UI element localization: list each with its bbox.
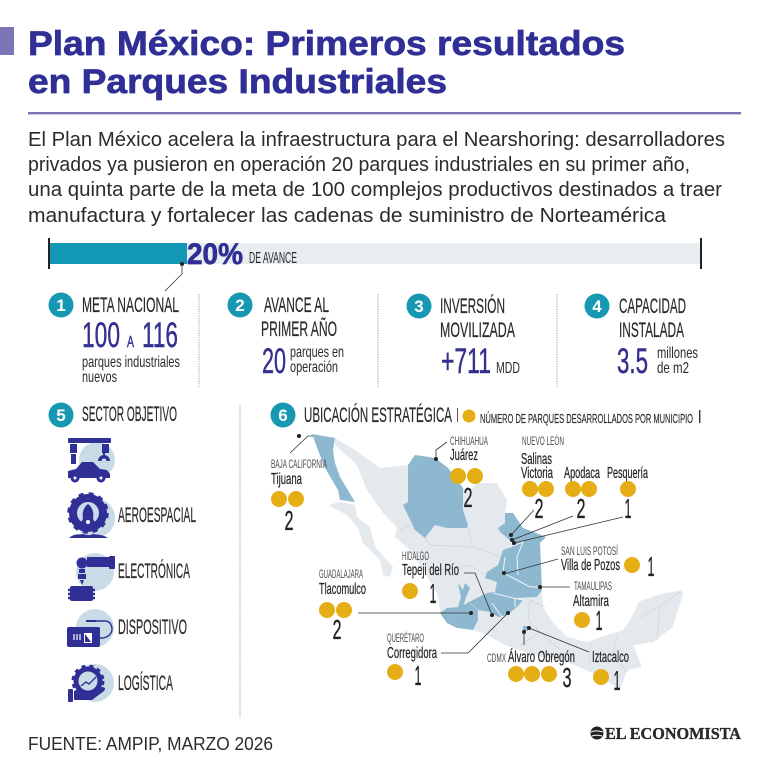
progress bar bbox=[48, 238, 702, 291]
heading: ubicación estratégica bbox=[270, 402, 700, 428]
panel: inversión movilizada: 3 bbox=[414, 297, 424, 316]
panel: avance al primer año: PRIMER AÑO bbox=[261, 317, 337, 341]
panel: capacidad instalada: INSTALADA bbox=[619, 319, 684, 342]
map: Aguascalientes bbox=[458, 583, 470, 607]
callout: Corregidora: 1 bbox=[414, 660, 422, 691]
map: mainland bbox=[335, 438, 683, 690]
callout: Tepeji del Río bbox=[402, 549, 494, 617]
panel: avance al primer año: 20 bbox=[262, 342, 286, 381]
callout: Iztacalco: 1 bbox=[614, 665, 620, 696]
panel: meta nacional: A bbox=[127, 334, 134, 351]
callout: Álvaro Obregón bbox=[487, 630, 575, 693]
callout: Nuevo León: Apodaca bbox=[564, 465, 600, 482]
callout: Tlacomulco: 2 bbox=[332, 614, 342, 645]
callout: Tepeji del Río: Tepeji del Río bbox=[402, 562, 459, 579]
icon: device bbox=[67, 609, 114, 647]
map: Chihuahua bbox=[403, 455, 468, 538]
callout: Altamira: TAMAULIPAS bbox=[574, 579, 612, 593]
text: 1 bbox=[648, 551, 654, 582]
panel: capacidad instalada: 4 bbox=[592, 297, 602, 316]
panel: meta nacional: META NACIONAL bbox=[82, 294, 179, 317]
callout: Tijuana: 2 bbox=[284, 505, 294, 536]
source: FUENTE: AMPIP, MARZO 2026 bbox=[28, 734, 273, 754]
callout: Tlacomulco: GUADALAJARA bbox=[319, 567, 363, 581]
panel: avance al primer año: AVANCE AL bbox=[264, 294, 329, 317]
callout: Nuevo León: Pesquería bbox=[607, 465, 648, 482]
callout: Iztacalco bbox=[527, 626, 629, 696]
panel: meta nacional: nuevos bbox=[82, 369, 117, 386]
title bbox=[28, 25, 625, 101]
map: CDMX bbox=[523, 626, 528, 631]
callout: Altamira bbox=[538, 579, 612, 636]
sector labels: DISPOSITIVO bbox=[118, 616, 187, 639]
panel: sector objetivo: SECTOR OBJETIVO bbox=[82, 403, 177, 426]
title: Plan México: Primeros resultados bbox=[28, 25, 625, 63]
callout: Juárez: Juárez bbox=[450, 447, 478, 464]
callout: Corregidora bbox=[387, 611, 510, 691]
icon: aerospace gear bbox=[69, 494, 115, 538]
callout: Nuevo León: 1 bbox=[624, 493, 632, 524]
panel: meta nacional: 1 bbox=[56, 296, 66, 315]
sector labels: ELECTRÓNICA bbox=[118, 560, 190, 583]
panel: capacidad instalada: CAPACIDAD bbox=[619, 295, 686, 318]
panel: meta nacional: 116 bbox=[142, 316, 178, 355]
map of Mexico bbox=[312, 434, 683, 690]
intro text: El Plan México acelera la infraestructura para el Nearshoring: desarrolladores bbox=[28, 129, 725, 151]
panel: meta nacional bbox=[48, 292, 180, 386]
callout: Juárez: CHIHUAHUA bbox=[450, 434, 488, 448]
intro text: privados ya pusieron en operación 20 parques industriales en su primer año, bbox=[28, 154, 690, 176]
map: state borders bbox=[492, 542, 542, 617]
sector labels: LOGÍSTICA bbox=[118, 672, 173, 695]
callout: Nuevo León bbox=[509, 433, 648, 545]
intro text: manufactura y fortalecer las cadenas de suministro de Norteamérica bbox=[28, 205, 667, 227]
panel: inversión movilizada: MDD bbox=[496, 360, 520, 377]
progress bar: 20% bbox=[187, 238, 243, 271]
callout: Juárez bbox=[434, 434, 488, 513]
callout: Tepeji del Río: HIDALGO bbox=[402, 549, 429, 563]
progress bar: DE AVANCE bbox=[249, 250, 297, 267]
callout: Nuevo León: 2 bbox=[534, 493, 544, 524]
panel: meta nacional: 100 bbox=[82, 316, 120, 355]
callout: Villa de Pozos: Villa de Pozos bbox=[561, 557, 620, 574]
callout: Villa de Pozos: SAN LUIS POTOSÍ bbox=[561, 543, 618, 558]
heading: ubicación estratégica: 6 bbox=[278, 406, 288, 425]
callout: Altamira: 1 bbox=[596, 605, 602, 636]
panel: capacidad instalada: millones bbox=[657, 345, 698, 362]
callout: Tijuana: Tijuana bbox=[271, 471, 302, 488]
intro text: una quinta parte de la meta de 100 complejos productivos destinados a traer bbox=[28, 179, 722, 201]
panel: avance al primer año bbox=[228, 292, 344, 381]
text: AEROESPACIAL bbox=[118, 504, 196, 527]
panel: meta nacional: parques industriales bbox=[82, 354, 180, 371]
icon: electronics arm bbox=[68, 553, 115, 601]
panel: inversión movilizada: INVERSIÓN bbox=[440, 295, 505, 318]
callout: Juárez: 2 bbox=[464, 482, 472, 513]
panel: capacidad instalada: de m2 bbox=[657, 360, 689, 377]
map: Baja California Sur bbox=[328, 502, 393, 577]
panel: inversión movilizada: +711 bbox=[441, 342, 491, 381]
callout: Tijuana bbox=[271, 434, 327, 536]
panel: sector objetivo: 5 bbox=[56, 406, 66, 425]
panel: capacidad instalada: 3.5 bbox=[617, 342, 648, 381]
callout: Álvaro Obregón: CDMX bbox=[487, 651, 506, 665]
callout: Nuevo León: NUEVO LEÓN bbox=[522, 433, 564, 448]
panel: inversión movilizada bbox=[406, 294, 520, 381]
heading: ubicación estratégica: UBICACIÓN ESTRATÉGICA bbox=[304, 404, 452, 427]
callout: Tepeji del Río: 1 bbox=[430, 578, 436, 609]
title: en Parques Industriales bbox=[28, 63, 447, 101]
icon: logistics hand bbox=[68, 664, 114, 702]
callout: Tijuana: BAJA CALIFORNIA bbox=[271, 457, 327, 471]
callout: Villa de Pozos bbox=[502, 543, 654, 582]
panel: avance al primer año: 2 bbox=[235, 296, 245, 315]
callout: Nuevo León: 2 bbox=[576, 493, 586, 524]
callout: Álvaro Obregón: 3 bbox=[562, 662, 572, 693]
callout: Tlacomulco: Tlacomulco bbox=[319, 581, 366, 598]
callout: Tlacomulco bbox=[319, 567, 473, 645]
map: northeast and central states bbox=[440, 513, 546, 630]
callout: Iztacalco: Iztacalco bbox=[592, 649, 629, 666]
panel: capacidad instalada bbox=[584, 294, 698, 381]
map: Baja California bbox=[312, 434, 355, 502]
callout: Altamira: Altamira bbox=[573, 593, 609, 610]
sector labels bbox=[118, 504, 196, 695]
callout: Álvaro Obregón: Álvaro Obregón bbox=[508, 647, 575, 666]
icon: automotive robot bbox=[68, 438, 115, 482]
panel: sector objetivo bbox=[48, 402, 196, 702]
title accent square bbox=[0, 27, 14, 55]
panel: avance al primer año: parques en bbox=[290, 344, 344, 361]
panel: inversión movilizada: MOVILIZADA bbox=[440, 319, 515, 342]
logo: El Economista: EL ECONOMISTA bbox=[605, 724, 742, 743]
callout: Nuevo León: Salinas bbox=[521, 451, 552, 468]
panel: avance al primer año: operación bbox=[290, 359, 338, 376]
callout: Corregidora: QUERÉTARO bbox=[387, 630, 424, 645]
intro text bbox=[28, 129, 725, 227]
callout: Corregidora: Corregidora bbox=[387, 645, 437, 662]
callout: Nuevo León: Victoria bbox=[521, 465, 553, 482]
